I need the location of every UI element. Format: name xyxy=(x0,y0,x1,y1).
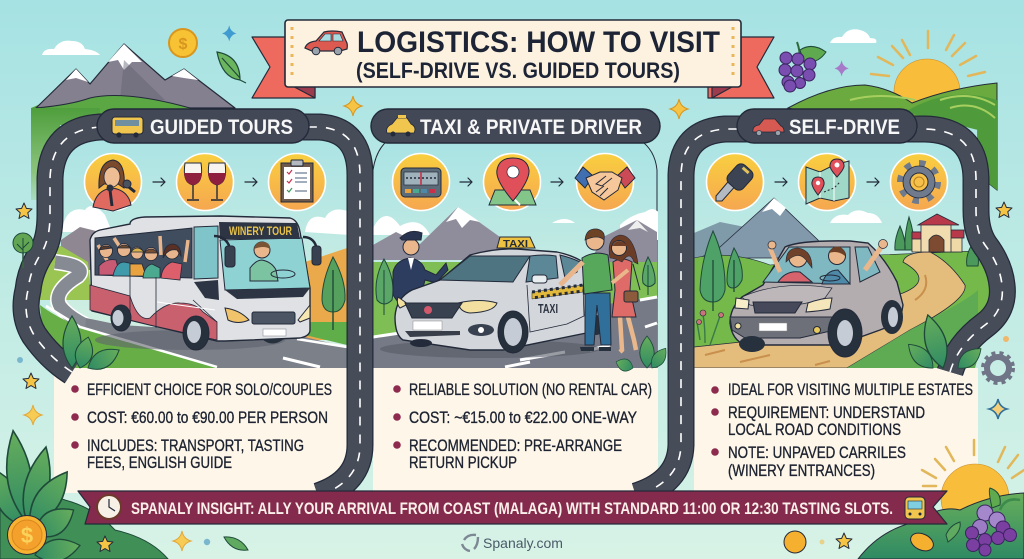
icon: taxi xyxy=(387,115,415,136)
bullets: taxi: RECOMMENDED: PRE-ARRANGE xyxy=(409,436,622,455)
icon: small red car xyxy=(753,119,784,136)
heading: self-drive: SELF-DRIVE xyxy=(789,116,900,139)
checker band xyxy=(532,285,583,299)
bus sign: WINERY TOUR xyxy=(229,224,292,238)
coin, bottom-left xyxy=(8,516,46,554)
road: self-drive xyxy=(636,129,1002,496)
taxi roof sign xyxy=(497,237,535,250)
title box xyxy=(285,20,741,87)
coin, bottom-left: $ xyxy=(21,523,33,548)
bullets: guided tours: INCLUDES: TRANSPORT, TASTING xyxy=(87,436,304,455)
right side decorations xyxy=(983,336,1013,419)
bullets: guided tours: COST: €60.00 to €90.00 PER PERSON xyxy=(87,408,328,427)
text panel: self-drive xyxy=(694,368,978,493)
icon: taximeter xyxy=(392,154,450,210)
icon row: self-drive xyxy=(706,154,948,210)
dirt road xyxy=(694,252,965,368)
heading: self-drive xyxy=(737,109,917,143)
decorative icons, top xyxy=(16,25,1012,219)
bullets: self-drive: NOTE: UNPAVED CARRILES xyxy=(728,443,906,462)
taxi roof sign: TAXI xyxy=(503,239,528,250)
footer: brand: Spanaly.com xyxy=(483,535,563,551)
icon: grapes, bottom-right xyxy=(966,488,1020,556)
bottom-right sun xyxy=(922,440,1024,532)
top-right sun and hills xyxy=(788,31,997,190)
bullets: taxi: COST: ~€15.00 to €22.00 ONE-WAY xyxy=(409,408,637,427)
couple xyxy=(560,229,640,352)
bullets: guided tours xyxy=(71,380,332,472)
icon row: taxi xyxy=(392,154,635,210)
bullets: self-drive: REQUIREMENT: UNDERSTAND xyxy=(728,403,925,422)
foreground leaves, guided tours xyxy=(63,316,123,375)
icon: car key xyxy=(706,154,764,210)
driver xyxy=(393,231,448,305)
road: guided tours xyxy=(26,127,360,496)
top-left mountains xyxy=(31,44,235,200)
mirrors xyxy=(214,236,316,248)
trees xyxy=(700,217,978,311)
taxi car xyxy=(395,249,601,350)
taxi door text: TAXI xyxy=(538,301,558,316)
winery building xyxy=(912,214,964,252)
tree right xyxy=(322,257,345,330)
bottom-left foliage xyxy=(0,429,168,559)
arrow xyxy=(245,178,257,186)
text panel: taxi xyxy=(373,368,658,493)
heading: taxi and private driver: TAXI & PRIVATE DRIVER xyxy=(420,116,642,139)
bus body xyxy=(90,216,310,341)
panel: guided tours background xyxy=(50,127,360,368)
flowers xyxy=(696,310,724,345)
bullets: taxi: RELIABLE SOLUTION (NO RENTAL CAR) xyxy=(409,380,652,399)
title text: LOGISTICS: HOW TO VISIT xyxy=(357,26,720,59)
icon: bus xyxy=(112,117,143,138)
icon: map xyxy=(798,154,856,210)
icon row: guided tours xyxy=(84,154,326,211)
bullets: taxi xyxy=(393,380,652,472)
arrow xyxy=(867,178,879,186)
icon: red car xyxy=(305,31,347,55)
wheels xyxy=(111,305,131,331)
left roadside tree xyxy=(13,233,33,268)
scene: guided tour bus xyxy=(38,206,350,368)
heading: guided tours xyxy=(97,109,309,143)
bullets: guided tours: FEES, ENGLISH GUIDE xyxy=(87,453,232,472)
trees xyxy=(376,257,655,304)
text panel: guided tours xyxy=(54,368,354,493)
scene: self-drive xyxy=(694,198,998,368)
arrow xyxy=(153,178,165,186)
foreground leaves, self-drive xyxy=(903,312,986,374)
arrow xyxy=(551,178,563,186)
self-drive car xyxy=(730,241,903,345)
bottom-left small decorations xyxy=(97,531,248,552)
heading: guided tours: GUIDED TOURS xyxy=(150,116,293,139)
bullets: self-drive: LOCAL ROAD CONDITIONS xyxy=(728,420,901,439)
bullets: taxi: RETURN PICKUP xyxy=(409,453,517,472)
icon: handshake xyxy=(575,154,635,210)
occupants xyxy=(768,240,888,284)
scene: taxi and driver xyxy=(373,207,660,368)
bullets: guided tours: EFFICIENT CHOICE FOR SOLO/COUPLES xyxy=(87,380,332,399)
panel: self-drive background xyxy=(681,129,976,368)
icon: clock xyxy=(97,495,121,519)
title ribbons xyxy=(252,37,774,98)
decorative icons, top: $ xyxy=(179,36,188,53)
icon: bus xyxy=(905,497,925,519)
icon: tour guide xyxy=(84,154,142,211)
heading: taxi and private driver xyxy=(371,109,660,143)
headlights grille plate xyxy=(225,308,249,322)
panel: taxi background xyxy=(373,140,657,368)
bullets: self-drive: (WINERY ENTRANCES) xyxy=(728,461,875,480)
passengers xyxy=(98,236,188,280)
winding road xyxy=(50,254,92,320)
bottom-right hill xyxy=(858,493,1024,559)
icon: gear xyxy=(890,154,948,210)
arrow xyxy=(460,178,472,186)
left side decorations xyxy=(17,357,42,425)
driver xyxy=(250,242,295,281)
insight banner xyxy=(78,491,947,524)
bottom-right small decorations xyxy=(784,522,960,554)
subtitle: (SELF-DRIVE VS. GUIDED TOURS) xyxy=(356,58,680,83)
icon: wine glasses xyxy=(176,154,234,210)
icon: map pin xyxy=(484,154,540,210)
foreground leaves, taxi xyxy=(614,336,671,374)
arrow xyxy=(775,178,787,186)
icon: checklist xyxy=(268,154,326,210)
bullets: self-drive xyxy=(711,380,973,480)
icon: grapes xyxy=(779,42,826,92)
